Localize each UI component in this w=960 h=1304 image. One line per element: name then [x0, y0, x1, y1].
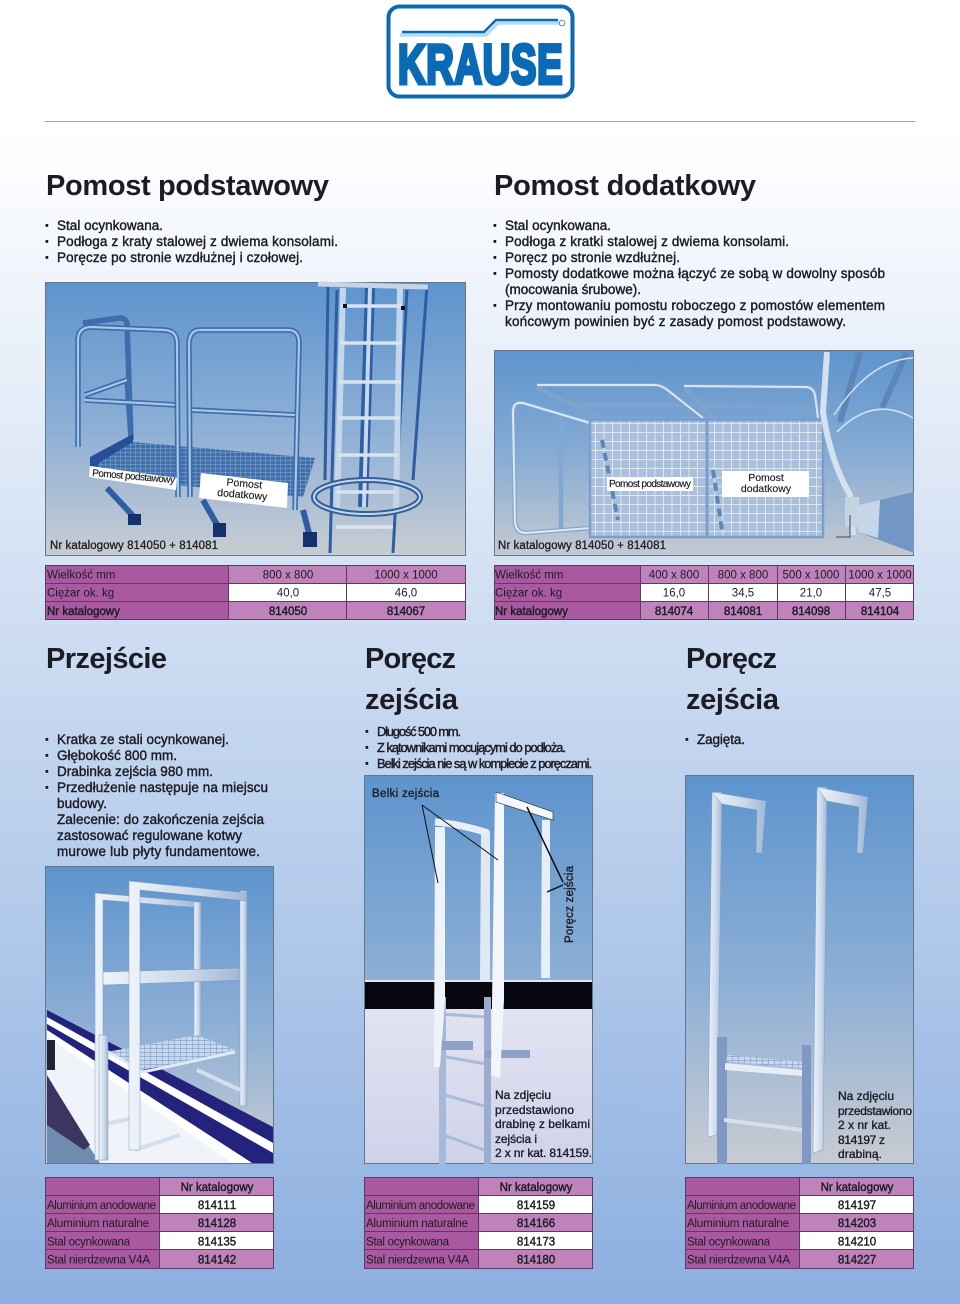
list: Pomost podstawowy features: · — [45, 250, 50, 265]
ladder with safety cage — [314, 284, 428, 553]
table: Poręcz zejścia second catalogue numbers: Aluminium naturalne — [687, 1218, 789, 1230]
table: Przejście catalogue numbers: Aluminium naturalne — [47, 1218, 149, 1230]
note: drabinę z belkami — [495, 1117, 590, 1131]
note: zejścia i — [495, 1132, 537, 1146]
table: Poręcz zejścia second catalogue numbers: 814203 — [838, 1218, 876, 1230]
table: Pomost dodatkowy specs: Wielkość mm — [495, 570, 563, 582]
right handrail hook — [813, 787, 868, 1153]
list: Pomost dodatkowy features: końcowym powinien być z zasady pomost podstawowy. — [505, 314, 846, 329]
list: Pomost dodatkowy features: · — [493, 218, 498, 233]
list: Przejście features: · — [45, 780, 50, 795]
table: Pomost dodatkowy specs: 500 x 1000 — [783, 570, 839, 582]
list: Przejście features: · — [45, 748, 50, 763]
label: Pomost dodatkowy: Pomost — [748, 472, 784, 484]
list: Przejście features — [45, 732, 268, 859]
table: Pomost dodatkowy specs: Ciężar ok. kg — [495, 588, 562, 600]
heading: Poręcz zejścia: zejścia — [365, 684, 459, 716]
platform deck and railings — [78, 318, 317, 547]
table: Przejście catalogue numbers: Stal ocynkowana — [47, 1236, 131, 1248]
list: Poręcz zejścia second features: Zagięta. — [697, 732, 745, 747]
list: Przejście features: Kratka ze stali ocynkowanej. — [57, 732, 229, 747]
list: Poręcz zejścia features — [365, 724, 592, 771]
table: Pomost podstawowy specs: 46,0 — [395, 588, 417, 600]
note: Na zdjęciu — [495, 1088, 551, 1102]
table: Poręcz zejścia catalogue numbers: 814180 — [517, 1254, 555, 1266]
ladder with step — [717, 1037, 811, 1164]
heading: Poręcz zejścia (second): Poręcz — [686, 643, 777, 675]
annotation lines: handrail — [527, 807, 563, 892]
label: Poręcz zejścia: Poręcz zejścia — [564, 865, 576, 943]
list: Poręcz zejścia features: Belki zejścia nie są w komplecie z poręczami. — [377, 756, 592, 771]
logo: Krause: KRAUSE — [398, 34, 563, 96]
list: Pomost podstawowy features: · — [45, 218, 50, 233]
note — [838, 1089, 912, 1161]
list: Pomost podstawowy features: Poręcze po stronie wzdłużnej i czołowej. — [57, 250, 303, 265]
table: Pomost podstawowy specs: 40,0 — [277, 588, 299, 600]
list: Pomost podstawowy features: Stal ocynkowana. — [57, 218, 163, 233]
note — [495, 1088, 592, 1160]
table: Pomost dodatkowy specs: 814074 — [655, 606, 694, 618]
handrail frames — [434, 792, 553, 1078]
table: Przejście catalogue numbers: 814128 — [198, 1218, 236, 1230]
table: Poręcz zejścia catalogue numbers: Aluminium anodowane — [366, 1200, 475, 1212]
heading: Poręcz zejścia: Poręcz — [365, 643, 456, 675]
logo: Krause — [388, 6, 572, 96]
table: Pomost dodatkowy specs: 1000 x 1000 — [848, 570, 912, 582]
table: Pomost dodatkowy specs: 800 x 800 — [718, 570, 768, 582]
list: Przejście features: · — [45, 732, 50, 747]
note: 2 x nr kat. — [838, 1118, 891, 1132]
label: Pomost dodatkowy: dodatkowy — [217, 487, 269, 503]
table: Pomost dodatkowy specs: 21,0 — [800, 588, 822, 600]
list: Poręcz zejścia features: Z kątownikami mocującymi do podłoża. — [377, 740, 566, 755]
mesh platform — [590, 420, 823, 537]
list: Pomost dodatkowy features: Podłoga z kratki stalowej z dwiema konsolami. — [505, 234, 789, 249]
list: Pomost dodatkowy features: Przy montowaniu pomostu roboczego z pomostów elementem — [505, 298, 885, 313]
list: Poręcz zejścia features: · — [365, 756, 370, 771]
heading: Poręcz zejścia (second): zejścia — [686, 684, 780, 716]
list: Pomost podstawowy features — [45, 218, 338, 265]
list: Pomost dodatkowy features: · — [493, 234, 498, 249]
note: przedstawiono — [495, 1103, 574, 1117]
table: Poręcz zejścia second catalogue numbers: 814210 — [838, 1236, 876, 1248]
list: Poręcz zejścia second features: · — [685, 732, 690, 747]
caption: Nr katalogowy 814050 + 814081 — [50, 540, 218, 552]
list: Pomost dodatkowy features: · — [493, 266, 498, 281]
list: Pomost dodatkowy features: · — [493, 298, 498, 313]
table: Poręcz zejścia second catalogue numbers: 814227 — [838, 1254, 876, 1266]
ladder — [437, 997, 530, 1164]
label: Pomost dodatkowy: Pomost — [226, 476, 263, 492]
list: Pomost podstawowy features: Podłoga z kraty stalowej z dwiema konsolami. — [57, 234, 338, 249]
table: Poręcz zejścia catalogue numbers: 814159 — [517, 1200, 555, 1212]
table: Przejście catalogue numbers: 814142 — [198, 1254, 236, 1266]
ladder side and beam — [823, 352, 914, 553]
caption: Nr katalogowy 814050 + 814081 — [498, 540, 666, 552]
label: Belki zejścia: Belki zejścia — [372, 788, 440, 800]
panel: Poręcz zejścia second photo — [686, 776, 914, 1164]
table: Poręcz zejścia second catalogue numbers: Stal nierdzewna V4A — [687, 1254, 790, 1266]
table: Pomost dodatkowy specs: 400 x 800 — [649, 570, 699, 582]
list: Poręcz zejścia features: · — [365, 740, 370, 755]
table: Przejście catalogue numbers: Nr katalogowy — [181, 1182, 254, 1194]
table: Pomost podstawowy specs: 814067 — [387, 606, 425, 618]
list: Przejście features: murowe lub płyty fundamentowe. — [57, 844, 260, 859]
panel: Przejście photo — [46, 866, 274, 1164]
annotation lines — [422, 805, 498, 883]
list: Poręcz zejścia features: · — [365, 724, 370, 739]
list: Pomost dodatkowy features: · — [493, 250, 498, 265]
label: Pomost dodatkowy — [722, 471, 809, 497]
table: Pomost dodatkowy specs: 814081 — [724, 606, 762, 618]
heading: Poręcz zejścia — [365, 643, 459, 716]
table: Poręcz zejścia catalogue numbers: Stal nierdzewna V4A — [366, 1254, 469, 1266]
list: Pomost podstawowy features: · — [45, 234, 50, 249]
panel: Poręcz zejścia photo — [364, 776, 592, 1164]
table: Przejście catalogue numbers: Stal nierdzewna V4A — [47, 1254, 150, 1266]
table: Poręcz zejścia catalogue numbers: Stal ocynkowana — [366, 1236, 450, 1248]
list: Przejście features: Przedłużenie następuje na miejscu — [57, 780, 268, 795]
list: Pomost dodatkowy features — [493, 218, 885, 329]
list: Przejście features: Drabinka zejścia 980 mm. — [57, 764, 213, 779]
list: Pomost dodatkowy features: Pomosty dodatkowe można łączyć ze sobą w dowolny sposób — [505, 266, 885, 281]
railings — [513, 385, 818, 533]
table: Pomost dodatkowy specs: 814104 — [861, 606, 900, 618]
label: Pomost dodatkowy: dodatkowy — [741, 483, 792, 495]
table: Poręcz zejścia catalogue numbers — [364, 1177, 593, 1269]
table: Poręcz zejścia second catalogue numbers: 814197 — [838, 1200, 876, 1212]
note: Na zdjęciu — [838, 1089, 894, 1103]
list: Pomost dodatkowy features: (mocowania śrubowe). — [505, 282, 641, 297]
heading: Pomost podstawowy: Pomost podstawowy — [46, 170, 329, 202]
list: Przejście features: zastosować regulowane kotwy — [57, 828, 242, 843]
label: Pomost dodatkowy — [199, 473, 288, 508]
heading: Przejście: Przejście — [46, 643, 167, 675]
list: Przejście features: budowy. — [57, 796, 107, 811]
list: Pomost dodatkowy features: Poręcz po stronie wzdłużnej. — [505, 250, 680, 265]
table: Pomost podstawowy specs: 800 x 800 — [263, 570, 313, 582]
table: Przejście catalogue numbers: 814111 — [198, 1200, 236, 1212]
list: Przejście features: Głębokość 800 mm. — [57, 748, 177, 763]
list: Przejście features: · — [45, 764, 50, 779]
note: 814197 z — [838, 1133, 885, 1147]
list: Poręcz zejścia features: Długość 500 mm. — [377, 724, 461, 739]
table: Pomost dodatkowy specs: 16,0 — [663, 588, 685, 600]
table: Pomost dodatkowy specs — [494, 565, 914, 620]
note: 2 x nr kat. 814159. — [495, 1146, 592, 1160]
heading: Poręcz zejścia (second) — [686, 643, 780, 716]
table: Poręcz zejścia second catalogue numbers: Stal ocynkowana — [687, 1236, 771, 1248]
table: Poręcz zejścia second catalogue numbers — [685, 1177, 914, 1269]
panel: photo of platforms with ladder — [46, 282, 466, 556]
table: Pomost dodatkowy specs: 47,5 — [869, 588, 891, 600]
panel: photo of mesh platforms from above — [494, 350, 914, 556]
list: Pomost dodatkowy features: Stal ocynkowana. — [505, 218, 611, 233]
heading: Pomost dodatkowy: Pomost dodatkowy — [494, 170, 756, 202]
table: Poręcz zejścia catalogue numbers: Nr katalogowy — [500, 1182, 573, 1194]
table: Pomost podstawowy specs: 1000 x 1000 — [374, 570, 438, 582]
table: Pomost podstawowy specs — [45, 565, 466, 620]
table: Poręcz zejścia catalogue numbers: 814166 — [517, 1218, 555, 1230]
table: Poręcz zejścia second catalogue numbers: Nr katalogowy — [821, 1182, 894, 1194]
label: Pomost podstawowy: Pomost podstawowy — [92, 468, 175, 486]
table: Pomost podstawowy specs: Ciężar ok. kg — [47, 588, 114, 600]
table: Pomost podstawowy specs: 814050 — [269, 606, 307, 618]
table: Pomost podstawowy specs: Wielkość mm — [47, 570, 115, 582]
building wall and stripes — [47, 1010, 273, 1163]
table: Pomost dodatkowy specs: Nr katalogowy — [495, 606, 568, 618]
note: przedstawiono — [838, 1104, 912, 1118]
left handrail hook — [708, 792, 766, 1137]
table: Pomost dodatkowy specs: 814098 — [792, 606, 830, 618]
list: Przejście features: Zalecenie: do zakończenia zejścia — [57, 812, 264, 827]
table: Przejście catalogue numbers — [45, 1177, 274, 1269]
table: Poręcz zejścia catalogue numbers: 814173 — [517, 1236, 555, 1248]
table: Poręcz zejścia catalogue numbers: Aluminium naturalne — [366, 1218, 468, 1230]
note: drabiną. — [838, 1147, 882, 1161]
walkway frames — [95, 881, 247, 1160]
table: Poręcz zejścia second catalogue numbers: Aluminium anodowane — [687, 1200, 796, 1212]
table: Pomost dodatkowy specs: 34,5 — [732, 588, 754, 600]
table: Przejście catalogue numbers: 814135 — [198, 1236, 236, 1248]
table: Pomost podstawowy specs: Nr katalogowy — [47, 606, 120, 618]
table: Przejście catalogue numbers: Aluminium anodowane — [47, 1200, 156, 1212]
label: Pomost podstawowy: Pomost podstawowy — [609, 479, 691, 490]
